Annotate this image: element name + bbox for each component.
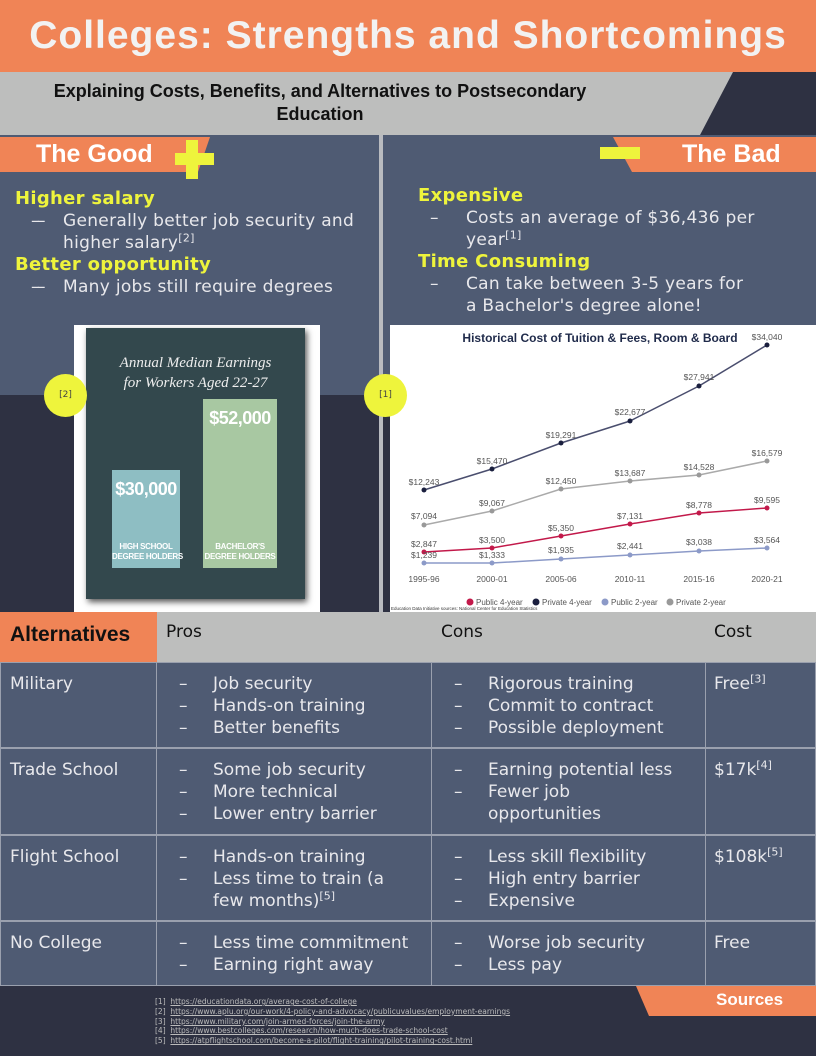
row: no college: Earning right away <box>213 955 373 975</box>
good text: Better opportunity <box>15 254 211 275</box>
bad text <box>418 185 755 316</box>
cost line chart: $1,333 <box>479 550 505 560</box>
citation circle [1]: [1] <box>379 390 392 400</box>
cost line chart: $3,500 <box>479 535 505 545</box>
row: trade school <box>0 748 816 835</box>
cost line chart: Public 2-year <box>611 598 658 607</box>
cost line chart: 2020-21 <box>751 574 783 584</box>
row: trade school: More technical <box>213 782 338 802</box>
cost line chart: $7,094 <box>411 511 437 521</box>
row: no college <box>0 921 816 986</box>
row: military: Hands-on training <box>213 696 366 716</box>
bad text: – <box>430 274 439 294</box>
row: flight school: Expensive <box>488 891 575 911</box>
row: trade school: $17k[4] <box>714 758 772 780</box>
citation circle [2]: [2] <box>59 390 72 400</box>
cost line chart: 2015-16 <box>683 574 715 584</box>
bar: high school: DEGREE HOLDERS <box>112 552 183 561</box>
row: military: Better benefits <box>213 718 340 738</box>
main panel background <box>0 135 816 395</box>
source list <box>155 997 510 1045</box>
cost line chart: $1,935 <box>548 545 574 555</box>
bar: bachelor: DEGREE HOLDERS <box>205 552 275 561</box>
bad text: a Bachelor's degree alone! <box>466 296 702 316</box>
cost line chart: $27,941 <box>684 372 715 382</box>
subtitle band <box>0 72 733 135</box>
bad text: Time Consuming <box>418 251 590 272</box>
cost line chart: Public 4-year <box>476 598 523 607</box>
cost line chart: $34,040 <box>752 332 783 342</box>
row: flight school: Flight School <box>10 847 119 867</box>
bar: high school: $30,000 <box>115 479 177 499</box>
row: military: Military <box>10 674 73 694</box>
cost line chart: $5,350 <box>548 523 574 533</box>
bad text: Expensive <box>418 185 523 206</box>
bar: bachelor: BACHELOR'S <box>215 542 265 551</box>
row: trade school: Lower entry barrier <box>213 804 377 824</box>
cost line chart: $9,067 <box>479 498 505 508</box>
title bar: Colleges: Strengths and Shortcomings <box>29 14 787 57</box>
cost line chart: $3,564 <box>754 535 780 545</box>
bar: bachelor <box>203 399 277 568</box>
bar: high school <box>112 470 180 568</box>
row: flight school: Less skill flexibility <box>488 847 646 867</box>
cost line chart: $15,470 <box>477 456 508 466</box>
cost line chart: $2,441 <box>617 541 643 551</box>
cost line chart: 2010-11 <box>615 574 646 584</box>
row: no college: No College <box>10 933 102 953</box>
row: military: Rigorous training <box>488 674 634 694</box>
row: flight school: $108k[5] <box>714 845 783 867</box>
source list: [1] https://educationdata.org/average-cost-of-college <box>155 997 357 1006</box>
source list: [2] https://www.aplu.org/our-work/4-policy-and-advocacy/publicuvalues/employment-earnings <box>155 1007 510 1016</box>
row: military: Free[3] <box>714 672 766 694</box>
cost line chart: $19,291 <box>546 430 577 440</box>
cost line chart: $3,038 <box>686 537 712 547</box>
cost line chart: $1,239 <box>411 550 437 560</box>
row: no college: Worse job security <box>488 933 645 953</box>
earnings chalkboard chart <box>74 325 320 612</box>
alternatives table <box>0 612 816 986</box>
tab: The Bad: The Bad <box>682 140 781 168</box>
sources tab: Sources <box>716 990 783 1009</box>
good text: – <box>31 211 40 231</box>
row: no college: Less time commitment <box>213 933 408 953</box>
row: no college: Free <box>714 933 750 953</box>
cost line chart: 1995-96 <box>408 574 440 584</box>
source list: [5] https://atpflightschool.com/become-a-pilot/flight-training/pilot-training-cost.html <box>155 1036 472 1045</box>
good text: Many jobs still require degrees <box>63 277 333 297</box>
cost line chart: $16,579 <box>752 448 783 458</box>
bad text: – <box>430 208 439 228</box>
row: military <box>0 662 816 748</box>
row: military: Commit to contract <box>488 696 653 716</box>
cost line chart <box>390 325 816 612</box>
cost line chart: $12,450 <box>546 476 577 486</box>
row: trade school: Some job security <box>213 760 366 780</box>
cost line chart: $9,595 <box>754 495 780 505</box>
row: flight school: Less time to train (a few months)[5] <box>213 869 384 911</box>
cost line chart: 2000-01 <box>476 574 508 584</box>
bad text: Can take between 3-5 years for <box>466 274 743 294</box>
table header: Cost <box>714 622 752 642</box>
good text <box>15 188 354 297</box>
row: flight school: Hands-on training <box>213 847 366 867</box>
good text: Higher salary <box>15 188 155 209</box>
row: trade school: Trade School <box>10 760 118 780</box>
row: flight school <box>0 835 816 921</box>
table header: Cons <box>441 622 483 642</box>
cost line chart: $22,677 <box>615 407 646 417</box>
earnings chalkboard chart: Annual Median Earnings <box>120 355 271 371</box>
row: military: Job security <box>213 674 312 694</box>
cost line chart: Education Data Initiative sources: National Center for Education Statistics <box>391 606 538 611</box>
row: flight school: High entry barrier <box>488 869 640 889</box>
cost line chart: $12,243 <box>409 477 440 487</box>
source list: [4] https://www.bestcolleges.com/research/how-much-does-trade-school-cost <box>155 1026 448 1035</box>
table header: Alternatives <box>10 623 130 646</box>
cost line chart: Private 4-year <box>542 598 592 607</box>
earnings chalkboard chart: for Workers Aged 22-27 <box>124 375 267 391</box>
row: trade school: Earning potential less <box>488 760 672 780</box>
cost line chart: $8,778 <box>686 500 712 510</box>
cost line chart: Private 2-year <box>676 598 726 607</box>
title bar <box>0 0 816 72</box>
cost line chart: $14,528 <box>684 462 715 472</box>
tab: The Good <box>0 137 214 179</box>
sources tab <box>636 986 816 1016</box>
row: trade school: Fewer job opportunities <box>488 782 601 824</box>
table header <box>0 612 816 662</box>
subtitle band: Explaining Costs, Benefits, and Alternatives to Postsecondary Education <box>54 81 586 124</box>
good text: – <box>31 277 40 297</box>
cost line chart: $13,687 <box>615 468 646 478</box>
bar: bachelor: $52,000 <box>209 408 271 428</box>
bad text: Costs an average of $36,436 per year[1] <box>466 208 755 250</box>
cost line chart: 2005-06 <box>545 574 577 584</box>
table header: Pros <box>166 622 202 642</box>
row: no college: Less pay <box>488 955 562 975</box>
good text: Generally better job security and higher salary[2] <box>63 211 354 253</box>
source list: [3] https://www.military.com/join-armed-forces/join-the-army <box>155 1017 385 1026</box>
cost line chart: $7,131 <box>617 511 643 521</box>
citation circle [2] <box>44 374 87 417</box>
bar: high school: HIGH SCHOOL <box>119 542 173 551</box>
cost line chart: $2,847 <box>411 539 437 549</box>
tab: The Good: The Good <box>36 140 153 168</box>
citation circle [1] <box>364 374 407 417</box>
row: military: Possible deployment <box>488 718 664 738</box>
cost line chart: Historical Cost of Tuition & Fees, Room & Board <box>462 331 738 345</box>
tab: The Bad <box>600 137 816 172</box>
